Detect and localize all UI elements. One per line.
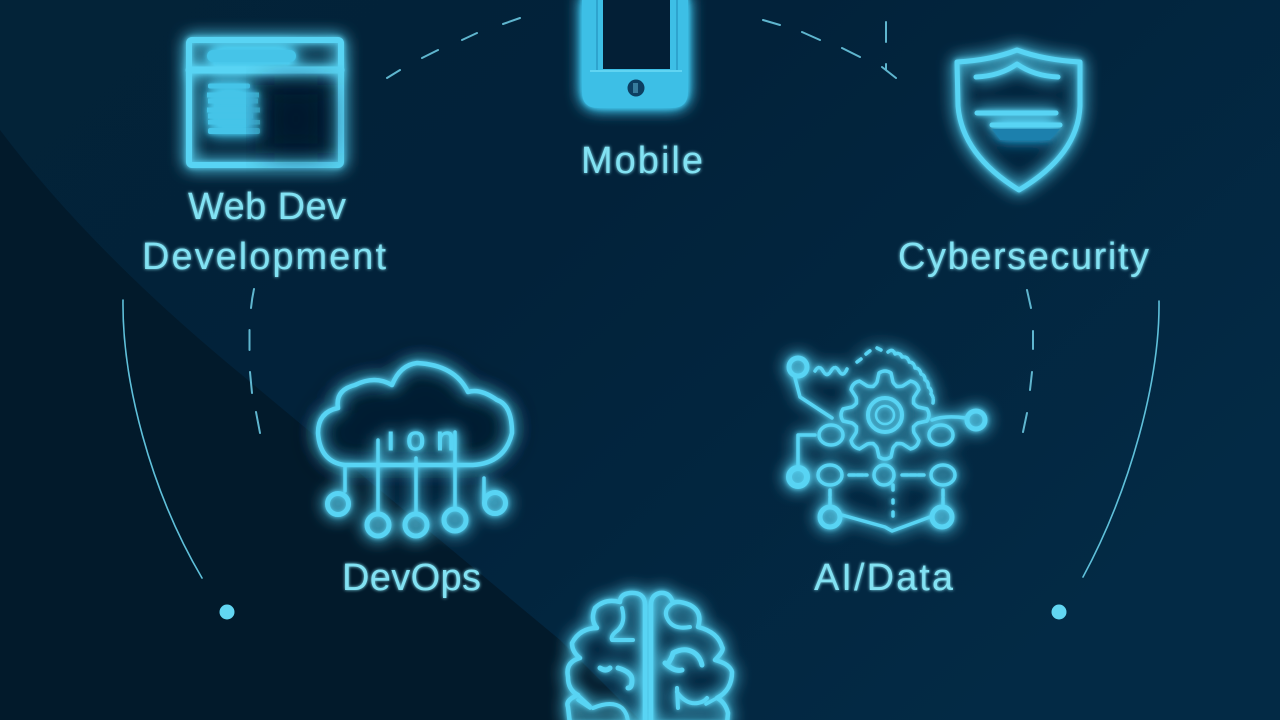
label: Mobile: Mobile bbox=[581, 140, 703, 182]
icon: brain bbox=[567, 593, 732, 720]
label: Web Dev Development: Web Dev bbox=[188, 186, 346, 228]
label: Web Dev Development bbox=[142, 186, 386, 278]
connector: left dashed arc bbox=[250, 289, 260, 433]
icon: cloud with circuit nodes bbox=[318, 363, 512, 536]
icon: web browser window bbox=[189, 40, 341, 165]
icon: AI gear and data nodes bbox=[789, 348, 985, 531]
outer arc: right bbox=[1083, 301, 1159, 577]
icon: mobile phone bbox=[582, 0, 688, 108]
label: Web Dev Development: Development bbox=[142, 236, 386, 278]
label: DevOps: DevOps bbox=[342, 557, 481, 599]
connector: top-left dashed arc bbox=[387, 18, 520, 78]
outer arc: left bbox=[123, 300, 202, 578]
connector: top-right dashed arc bbox=[763, 20, 896, 78]
icon: security shield bbox=[957, 50, 1080, 190]
label: Cybersecurity: Cybersecurity bbox=[898, 236, 1149, 278]
icon: cloud with circuit nodes: ıon bbox=[386, 420, 455, 458]
dot: left bbox=[220, 604, 234, 620]
connector: right dashed arc bbox=[1023, 290, 1033, 432]
dot: right bbox=[1052, 604, 1066, 620]
label: AI/Data: AI/Data bbox=[814, 557, 954, 599]
